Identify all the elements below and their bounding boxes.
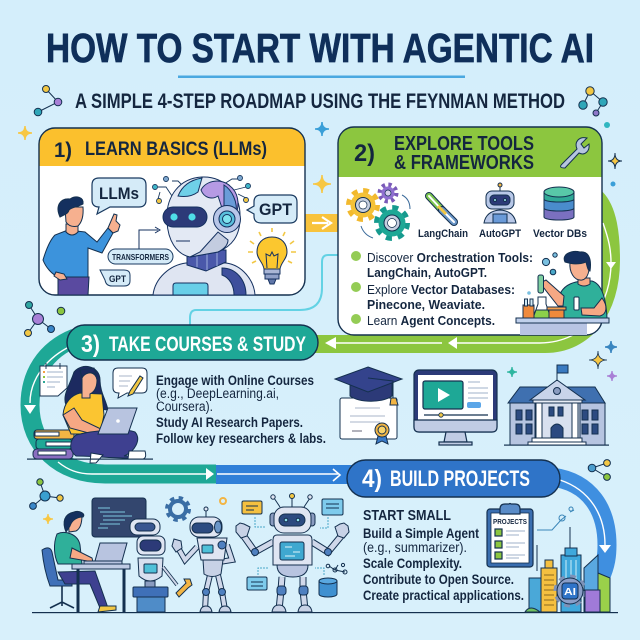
pill: step 4 heading — [347, 460, 560, 497]
connector: cyan line — [190, 255, 340, 326]
label: small GPT — [100, 270, 130, 286]
pill: step 3 heading: 3) — [81, 331, 100, 358]
icon: projects clipboard — [487, 504, 533, 567]
label: transformers: TRANSFORMERS — [112, 252, 169, 262]
icon: database — [544, 187, 574, 220]
text block: step 4: (e.g., summarizer). — [363, 540, 467, 555]
bullet list — [351, 250, 533, 328]
icon: gear — [168, 499, 188, 519]
bullet list: Pinecone, Weaviate. — [367, 297, 485, 312]
heading: step 2: 2) — [354, 140, 375, 167]
woman with laptop — [63, 366, 146, 463]
icon: projects clipboard: PROJECTS — [493, 517, 527, 526]
icon: speech with pencil — [113, 368, 147, 398]
developer at desk — [42, 511, 130, 612]
bullet list: Explore Vector Databases: — [367, 282, 515, 297]
robot — [153, 177, 255, 295]
text block: step 4: Scale Complexity. — [363, 556, 462, 571]
robot with wrench — [130, 519, 192, 612]
icon: share nodes — [588, 460, 610, 480]
text block: step 3: Follow key researchers & labs. — [156, 431, 326, 446]
bullet list: LangChain, AutoGPT. — [367, 265, 487, 280]
floating icons: notes and data — [242, 499, 347, 597]
robot middle — [172, 507, 232, 612]
heading: step 1: LEARN BASICS (LLMs) — [85, 139, 267, 160]
text block: step 3: (e.g., DeepLearning.ai, — [156, 386, 279, 401]
speech bubble: LLMs — [92, 178, 146, 214]
code screen — [92, 498, 146, 537]
arrow: green path — [312, 198, 616, 349]
arrow: panel 1 to panel 2 — [305, 214, 338, 232]
text block: step 3 — [156, 373, 326, 446]
heading: step 2: EXPLORE TOOLS — [394, 133, 534, 155]
icon: sparkles — [18, 122, 622, 524]
pill: step 3 heading: TAKE COURSES & STUDY — [109, 333, 306, 356]
icon: checklist note — [40, 363, 67, 396]
books — [33, 430, 74, 459]
text block: step 4: START SMALL — [363, 507, 451, 524]
pill: step 3 heading — [67, 325, 318, 360]
text block: step 3: Study AI Research Papers. — [156, 415, 303, 430]
ground line — [32, 612, 618, 613]
heading: step 1: 1) — [54, 139, 72, 162]
label: transformers — [108, 249, 173, 264]
speech bubble: GPT: GPT — [259, 200, 293, 219]
panel: step 1 learn basics — [39, 128, 305, 295]
panel: step 2 explore tools — [338, 127, 609, 335]
text block: step 4: Contribute to Open Source. — [363, 572, 514, 587]
labels: tools: LangChain — [418, 228, 468, 240]
icon: wrench — [561, 138, 589, 168]
icon: graduation cap and diploma — [335, 367, 402, 444]
pill: step 4 heading: BUILD PROJECTS — [390, 466, 530, 491]
arrow: teal path — [24, 338, 216, 480]
speech bubble: GPT — [247, 195, 297, 223]
labels: tools: AutoGPT — [479, 228, 521, 240]
icon: chain link — [429, 196, 454, 222]
labels: tools: Vector DBs — [533, 228, 587, 240]
text block: step 4 — [363, 507, 524, 603]
heading: step 1 — [54, 139, 267, 162]
icon: video monitor — [414, 370, 497, 445]
arrow: transformers up — [139, 227, 160, 249]
text block: step 4: Create practical applications. — [363, 588, 524, 603]
circuit nodes right — [224, 176, 250, 202]
arrow: blue path — [216, 469, 611, 578]
text block: step 3: Coursera). — [156, 399, 213, 414]
icon: mini robot — [484, 183, 516, 223]
icon: light bulb — [248, 228, 296, 284]
person pointing — [43, 197, 120, 295]
icon: molecule bottom left — [30, 479, 63, 509]
speech bubble: LLMs: LLMs — [99, 184, 139, 203]
heading: step 2: & FRAMEWORKS — [394, 152, 534, 174]
heading: step 2 — [354, 133, 534, 174]
icon: AI city — [525, 507, 610, 612]
icon: molecule top right — [579, 87, 610, 128]
robot large — [236, 494, 349, 612]
icon: gears — [349, 185, 410, 238]
icon: university building — [508, 365, 605, 445]
label: small GPT: GPT — [109, 274, 126, 284]
icon: molecule mid left — [24, 302, 65, 336]
bullet list: Learn Agent Concepts. — [367, 313, 495, 328]
icon: molecule top left — [34, 86, 62, 116]
text block: step 4: Build a Simple Agent — [363, 526, 479, 541]
text block: step 3: Engage with Online Courses — [156, 373, 314, 388]
labels: tools — [418, 228, 587, 240]
scientist — [516, 251, 609, 335]
bullet list: Discover Orchestration Tools: — [367, 250, 533, 265]
circuit nodes left — [152, 176, 184, 204]
icon: AI city: AI — [564, 587, 576, 598]
pill: step 4 heading: 4) — [362, 465, 382, 493]
